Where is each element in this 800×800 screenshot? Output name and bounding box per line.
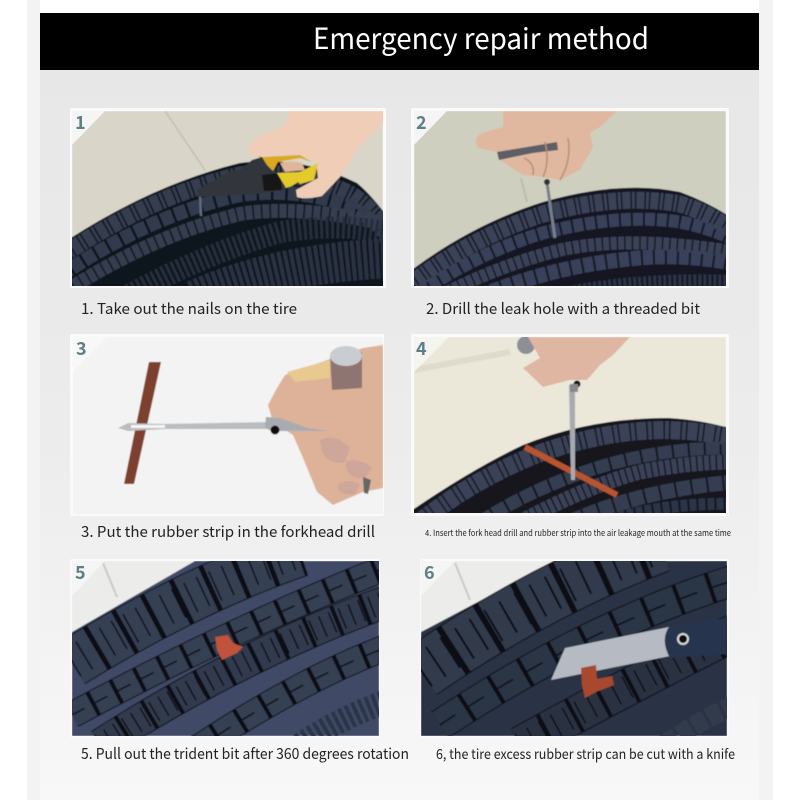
panel: step 4 photo xyxy=(405,334,735,522)
panel: step 3 photo xyxy=(70,334,384,516)
title banner xyxy=(40,13,759,70)
panel: step 6 photo xyxy=(420,559,729,736)
panel: step 2 photo xyxy=(405,108,735,300)
label 3: 3. Put the rubber strip in the forkhead drill xyxy=(81,521,375,542)
number badge 4 xyxy=(414,335,449,372)
number badge 2 xyxy=(414,109,447,145)
number badge 5 xyxy=(72,559,105,596)
panel: step 5 photo xyxy=(70,559,380,736)
number badge 1: 1 xyxy=(75,109,86,135)
number badge 6 xyxy=(421,559,455,596)
label 6: 6, the tire excess rubber strip can be cut with a knife xyxy=(436,744,735,764)
number badge 3 xyxy=(73,335,107,372)
number badge 2: 2 xyxy=(416,109,427,135)
number badge 4: 4 xyxy=(416,335,427,361)
label 4: 4. Insert the fork head drill and rubber strip into the air leakage mouth at the same time xyxy=(425,527,731,539)
panel: step 1 photo xyxy=(70,108,386,288)
number badge 5: 5 xyxy=(75,559,86,585)
number badge 6: 6 xyxy=(424,559,435,585)
label 1: 1. Take out the nails on the tire xyxy=(81,298,297,319)
number badge 1 xyxy=(72,109,105,145)
number badge 3: 3 xyxy=(76,335,87,361)
label 2: 2. Drill the leak hole with a threaded bit xyxy=(426,298,700,319)
title banner: Emergency repair method xyxy=(313,16,649,58)
label 5: 5. Pull out the trident bit after 360 degrees rotation xyxy=(81,743,409,764)
